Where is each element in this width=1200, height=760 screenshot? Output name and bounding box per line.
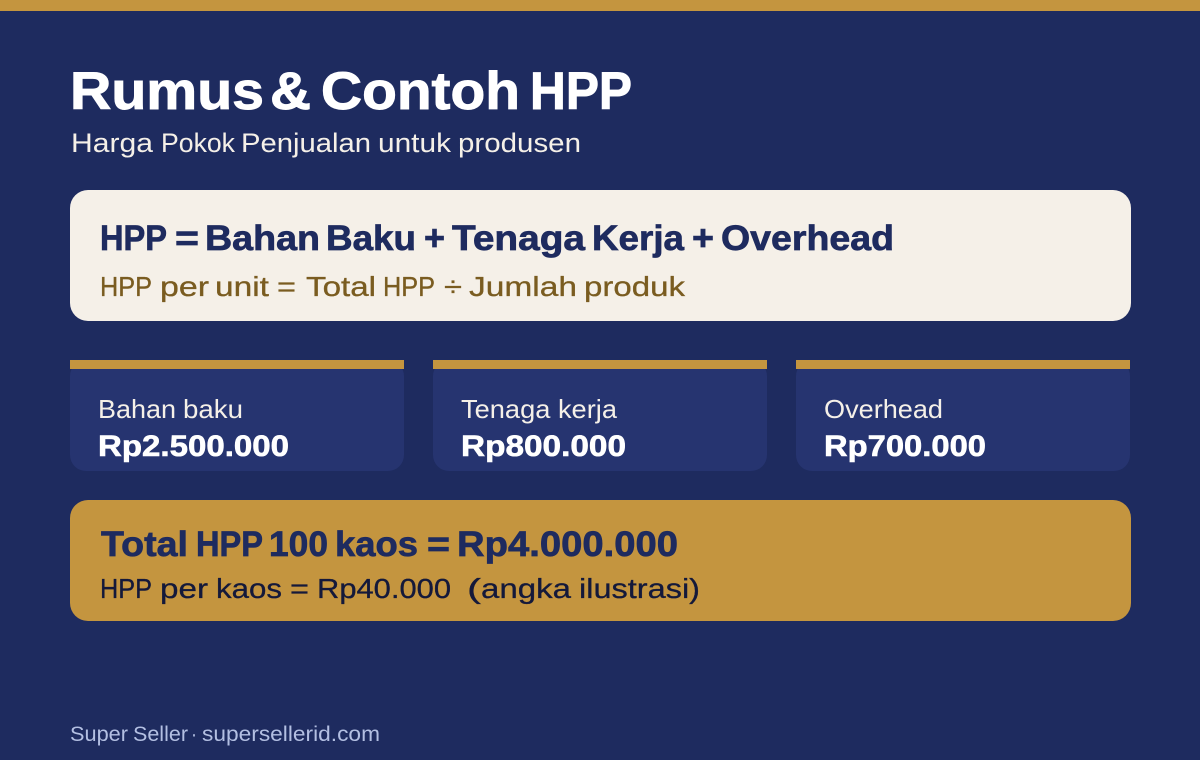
per-unit formula: produk <box>584 271 686 302</box>
per-kaos result: Rp40.000 <box>317 573 451 604</box>
title: Contoh <box>321 62 520 121</box>
title <box>70 62 632 121</box>
formula heading: + <box>692 219 714 258</box>
per-unit formula: Total <box>306 271 376 302</box>
footer: Seller <box>133 723 188 746</box>
formula heading <box>100 219 894 258</box>
subtitle: Pokok <box>161 128 235 158</box>
footer <box>70 723 380 746</box>
formula heading: + <box>424 219 445 258</box>
per-unit formula: = <box>277 271 296 302</box>
panel: total <box>70 500 1131 621</box>
panel: formula <box>70 190 1131 321</box>
value: bahan baku: Rp2.500.000 <box>98 430 289 463</box>
per-unit formula: HPP <box>100 271 152 302</box>
formula heading: = <box>175 219 199 258</box>
per-unit formula: ÷ <box>444 271 462 302</box>
per-kaos result: = <box>290 573 309 604</box>
per-kaos result: angka <box>481 573 571 604</box>
card: overhead <box>796 360 1130 471</box>
formula heading: HPP <box>100 219 167 258</box>
per-kaos result: per <box>160 573 208 604</box>
subtitle: Harga <box>71 128 154 158</box>
footer: supersellerid.com <box>202 723 380 746</box>
formula heading: Overhead <box>721 219 894 258</box>
subtitle: produsen <box>458 128 581 158</box>
footer: Super <box>70 723 128 746</box>
total heading <box>101 525 678 564</box>
formula heading: Tenaga <box>452 219 586 258</box>
per-kaos result: ilustrasi) <box>579 573 700 604</box>
label: bahan baku: baku <box>183 394 243 424</box>
total heading: 100 <box>269 525 328 564</box>
per-unit formula: Jumlah <box>469 271 577 302</box>
per-unit formula: unit <box>215 271 269 302</box>
value: tenaga kerja: Rp800.000 <box>461 430 626 463</box>
per-kaos result: ( <box>467 573 482 604</box>
per-unit formula <box>100 271 686 302</box>
formula heading: Baku <box>326 219 416 258</box>
title: & <box>270 62 311 121</box>
total heading: HPP <box>196 525 263 564</box>
card: tenaga kerja <box>433 360 767 471</box>
total heading: Total <box>101 525 188 564</box>
subtitle <box>71 128 581 158</box>
per-kaos result: HPP <box>100 573 152 604</box>
label: overhead: Overhead <box>824 394 943 424</box>
per-unit formula: HPP <box>383 271 435 302</box>
title: HPP <box>530 62 632 121</box>
per-kaos result: kaos <box>216 573 282 604</box>
subtitle: Penjualan <box>241 128 371 158</box>
title: Rumus <box>70 62 264 121</box>
value: overhead: Rp700.000 <box>824 430 986 463</box>
per-kaos result <box>100 573 700 604</box>
label: tenaga kerja: Tenaga kerja <box>461 394 618 424</box>
total heading: = <box>427 525 450 564</box>
formula heading: Kerja <box>592 219 685 258</box>
label: bahan baku: Bahan <box>98 394 176 424</box>
total heading: Rp4.000.000 <box>457 525 678 564</box>
footer: · <box>191 723 197 746</box>
per-unit formula: per <box>160 271 209 302</box>
formula heading: Bahan <box>205 219 320 258</box>
total heading: kaos <box>335 525 418 564</box>
subtitle: untuk <box>378 128 452 158</box>
label: bahan baku <box>98 394 243 424</box>
card: bahan baku <box>70 360 404 471</box>
